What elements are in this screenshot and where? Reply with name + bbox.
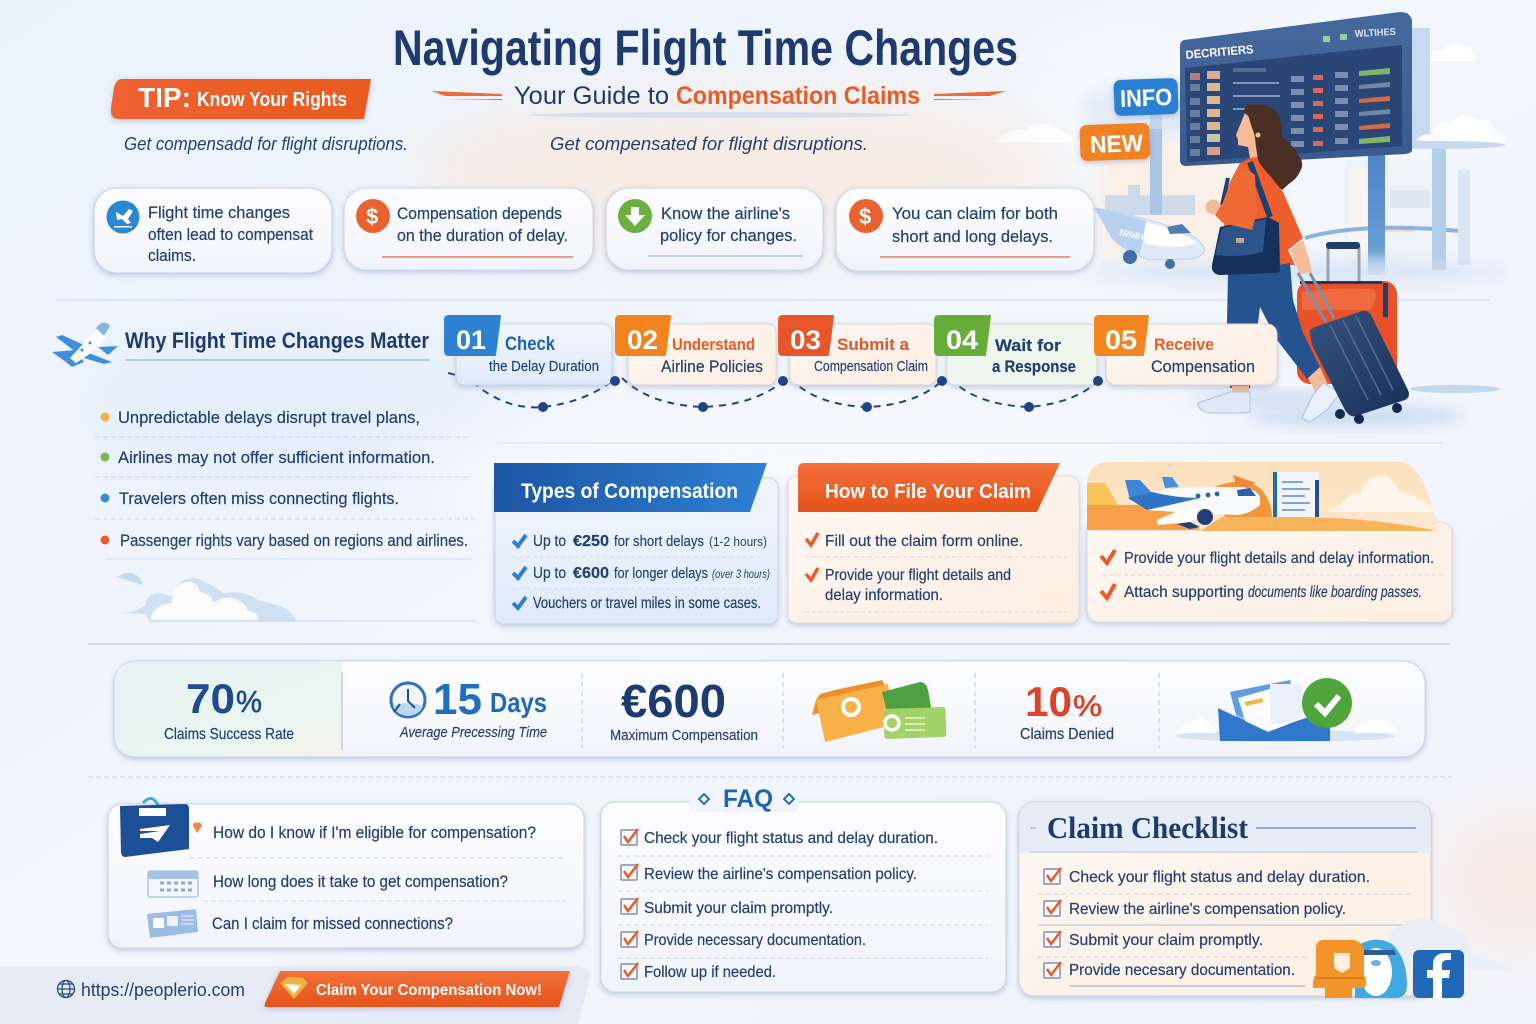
item: provide details	[806, 567, 1011, 604]
icon: takeoff	[106, 200, 140, 234]
card: airline policy	[606, 188, 823, 270]
icon: green arrow	[618, 199, 652, 233]
red suitcase	[1297, 242, 1397, 384]
stat: 15 days: Days	[490, 687, 547, 718]
step 04 wait for a response: a Response	[992, 357, 1076, 376]
icon: dollar: $	[859, 204, 871, 229]
subtitle	[432, 82, 1006, 118]
step 02 understand airline policies: Understand	[672, 335, 755, 354]
step 03 submit a compensation claim: Submit a	[837, 335, 910, 354]
item: attach documents	[1101, 584, 1422, 601]
step 05 receive compensation: Compensation	[1151, 357, 1255, 376]
item: up to 250: (1-2 hours)	[709, 534, 767, 549]
icon: calendar	[148, 871, 198, 897]
orange jacket	[1222, 157, 1303, 265]
new badge	[1079, 123, 1151, 161]
stat: 10 percent denied: %	[1073, 690, 1102, 723]
icon: dollar: $	[366, 204, 378, 229]
step dots	[538, 376, 1103, 412]
stat: 10 percent denied: Claims Denied	[1020, 726, 1114, 743]
card: compensation depends	[344, 188, 593, 270]
stat: 70 percent: Claims Success Rate	[164, 726, 294, 743]
panel: stats bar	[114, 661, 1425, 757]
step 03 submit a compensation claim: 03	[790, 325, 821, 355]
traveler illustration	[1190, 104, 1500, 425]
stat: 15 days: Average Precessing Time	[399, 724, 547, 741]
question 1: How do I know if I'm eligible for compensation?	[213, 823, 536, 842]
card: flight time changes: Flight time changes	[148, 203, 290, 222]
info badge: INFO	[1120, 84, 1173, 113]
icon: heart	[193, 822, 202, 833]
icon: blue airplane	[52, 322, 118, 367]
step 01 check delay duration	[445, 316, 612, 385]
icon: document	[1273, 472, 1319, 517]
pants	[1227, 263, 1320, 388]
tip badge	[111, 79, 371, 119]
question 2: How long does it take to get compensation?	[213, 872, 508, 891]
call to action button: Claim Your Compensation Now!	[316, 982, 542, 999]
card: flight time changes	[94, 188, 332, 273]
checklist item 4: Provide necesary documentation.	[1069, 962, 1295, 979]
hair	[1243, 104, 1302, 190]
tagline left: Get compensadd for flight disruptions.	[124, 134, 408, 154]
checklist item 2: Review the airline's compensation policy.	[1069, 901, 1346, 918]
card: compensation depends: on the duration of delay.	[397, 226, 568, 245]
info badge	[1113, 78, 1179, 116]
card: compensation depends: Compensation depends	[397, 204, 562, 223]
departures board: WLTIHES	[1355, 27, 1396, 40]
icon: navy document	[120, 798, 189, 857]
item: attach documents: documents like boarding passes.	[1248, 584, 1422, 601]
subtitle: Your Guide to	[514, 82, 669, 110]
item: provide details: Provide your flight details and	[825, 567, 1011, 584]
departures board: DECRITIERS	[1185, 42, 1254, 62]
item: provide flight details: Provide your flight details and delay information.	[1124, 550, 1434, 567]
bullet 1: Unpredictable delays disrupt travel plans,	[118, 408, 420, 427]
faq item 3: Submit your claim promptly.	[644, 900, 833, 917]
panel: questions list	[108, 798, 584, 948]
step 05 receive compensation	[1095, 316, 1277, 385]
card: airline policy: policy for changes.	[660, 226, 797, 245]
item: attach documents: Attach supporting	[1124, 584, 1244, 601]
left shoe	[1198, 392, 1250, 413]
social icons	[1313, 940, 1464, 998]
steps path dashed connector	[448, 373, 1098, 407]
step 02 understand airline policies: Airline Policies	[661, 357, 763, 376]
stat: 600 euro	[610, 675, 758, 744]
shoulder bag	[1212, 162, 1280, 275]
item: up to 600: €600	[573, 565, 609, 582]
tip badge: TIP:	[138, 82, 191, 113]
right shoe	[1302, 383, 1340, 422]
stat: 600 euro: €600	[621, 675, 726, 727]
title: Navigating Flight Time Changes	[393, 20, 1018, 76]
item: vouchers: Vouchers or travel miles in some cases.	[533, 595, 761, 612]
website link: https://peoplerio.com	[81, 980, 245, 1000]
bullet list: why it matters	[95, 408, 475, 559]
section divider lines	[56, 300, 1490, 777]
icon: dollar	[356, 199, 390, 233]
orange arch	[1212, 481, 1272, 517]
step 02 understand airline policies: 02	[627, 325, 658, 355]
illustration: airplane and document	[1087, 462, 1440, 531]
footer band	[0, 966, 590, 1024]
airport backdrop illustration	[995, 28, 1510, 284]
stat: 15 days: 15	[433, 675, 482, 724]
step 04 wait for a response	[935, 316, 1097, 385]
step 03 submit a compensation claim: Compensation Claim	[814, 358, 928, 375]
icon: globe	[58, 980, 74, 998]
faq item 1: Check your flight status and delay duration.	[644, 830, 938, 847]
card: short and long delays: short and long delays.	[892, 227, 1053, 246]
faq item 5: Follow up if needed.	[644, 964, 776, 981]
faq item 2: Review the airline's compensation policy.	[644, 866, 917, 883]
item: up to 250: €250	[573, 533, 609, 550]
icon: clock	[391, 683, 425, 717]
icon: diamond	[280, 977, 308, 999]
icon: blue mascot	[1355, 940, 1407, 998]
tip badge: Know Your Rights	[197, 89, 347, 111]
face	[1236, 113, 1259, 160]
panel: faq checklist	[601, 785, 1006, 992]
icon: pale parked airplane: TRNBY	[1118, 227, 1147, 243]
stat: 70 percent	[164, 675, 294, 743]
item: up to 600: (over 3 hours)	[712, 567, 770, 581]
item: provide details: delay information.	[825, 587, 943, 604]
header ribbon: How to File Your Claim	[825, 481, 1031, 503]
icon: ticket	[147, 909, 198, 938]
question 3: Can I claim for missed connections?	[212, 914, 453, 933]
card: flight time changes: often lead to compensat	[148, 225, 313, 244]
panel: attach documents	[1087, 462, 1452, 622]
checklist heading: Claim Checklist	[1047, 810, 1249, 845]
icon: money folders	[812, 680, 947, 742]
stat: 70 percent: 70	[186, 675, 235, 722]
item: up to 250: for short delays	[614, 533, 704, 550]
checklist item 3: Submit your claim promptly.	[1069, 932, 1263, 949]
icon: airplane	[1125, 477, 1260, 529]
bullet 2: Airlines may not offer sufficient information.	[118, 448, 435, 467]
step 03 submit a compensation claim	[779, 316, 936, 385]
stat: 600 euro: Maximum Compensation	[610, 727, 758, 744]
stat: 70 percent: %	[236, 684, 262, 719]
panel: how to file your claim	[788, 463, 1079, 623]
checklist item 1: Check your flight status and delay duration.	[1069, 869, 1370, 886]
panel: claim checklist	[1019, 802, 1431, 996]
call to action button	[265, 971, 570, 1007]
faq heading: FAQ	[723, 785, 773, 813]
item: up to 600: for longer delays	[614, 565, 708, 582]
icon: orange badge	[1313, 940, 1366, 998]
step 05 receive compensation: Receive	[1154, 335, 1214, 354]
front sleeve	[1215, 163, 1257, 230]
step 04 wait for a response: 04	[946, 325, 978, 355]
icon: pale parked airplane	[1095, 208, 1205, 269]
icon: facebook	[1413, 950, 1464, 998]
card: flight time changes: claims.	[148, 246, 196, 265]
item: up to 600	[513, 565, 770, 582]
stat: 10 percent denied	[1020, 678, 1114, 743]
icon: dollar	[849, 199, 883, 233]
stat: 10 percent denied: 10	[1025, 678, 1072, 725]
shadow under traveler	[1190, 385, 1500, 425]
icon: envelope with check	[1175, 678, 1398, 742]
cloud behind social icons	[1384, 918, 1510, 970]
new badge: NEW	[1090, 130, 1144, 159]
bullet 3: Travelers often miss connecting flights.	[119, 489, 399, 508]
card: short and long delays	[836, 188, 1094, 271]
board rows	[1190, 68, 1390, 156]
bullet 4: Passenger rights vary based on regions and airlines.	[120, 531, 468, 550]
step 01 check delay duration: the Delay Duration	[489, 358, 599, 375]
departures board	[1180, 12, 1412, 166]
panel: types of compensation	[494, 463, 778, 624]
subtitle: Compensation Claims	[676, 82, 920, 110]
navy suitcase	[1298, 273, 1409, 424]
step 04 wait for a response: Wait for	[995, 336, 1061, 355]
decorative cloud	[117, 573, 476, 622]
ankles and hands	[1206, 132, 1328, 396]
item: up to 250	[513, 533, 767, 550]
item: up to 250: Up to	[533, 533, 566, 550]
card: short and long delays: You can claim for both	[892, 204, 1058, 223]
tagline center: Get compensated for flight disruptions.	[550, 134, 868, 154]
item: fill out form: Fill out the claim form online.	[825, 533, 1023, 550]
heading: why flight time changes matter: Why Flight Time Changes Matter	[125, 328, 429, 353]
item: up to 600: Up to	[533, 565, 566, 582]
stat: 15 days	[391, 675, 547, 741]
header ribbon	[494, 463, 767, 512]
header ribbon: Types of Compensation	[521, 480, 738, 503]
step 05 receive compensation: 05	[1105, 325, 1137, 355]
step 01 check delay duration: 01	[456, 325, 486, 355]
header ribbon	[798, 463, 1060, 512]
step 02 understand airline policies	[616, 316, 776, 385]
card: airline policy: Know the airline's	[661, 204, 790, 223]
faq item 4: Provide necessary documentation.	[644, 932, 866, 949]
step 01 check delay duration: Check	[505, 334, 555, 355]
faq heading	[690, 785, 798, 813]
